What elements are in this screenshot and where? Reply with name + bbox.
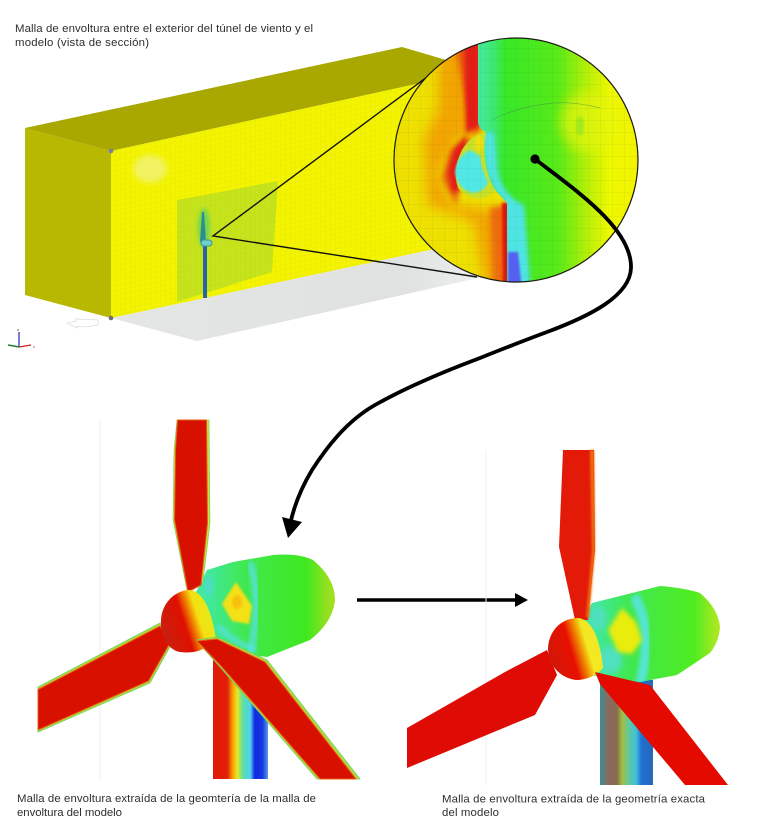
title: wind tunnel mesh caption: Malla de envoltura entre el exterior del túnel de viento y el bbox=[15, 23, 313, 35]
flow outline on floor bbox=[67, 319, 98, 328]
tower bbox=[213, 660, 268, 779]
straight arrow between turbines bbox=[357, 593, 528, 607]
flow region right of the model bbox=[478, 38, 638, 282]
curved arrow from circle to enlarged turbine bbox=[282, 154, 631, 538]
hub on section bbox=[201, 240, 212, 246]
hub bbox=[548, 618, 603, 680]
axis triad: x bbox=[33, 344, 35, 349]
axis triad: z bbox=[17, 327, 19, 332]
cyan band along tower bbox=[484, 132, 531, 290]
turbine from exact geometry bbox=[407, 450, 728, 785]
light patch on section bbox=[133, 155, 167, 183]
top outer face bbox=[25, 47, 480, 151]
zoom callout lines bbox=[213, 77, 477, 277]
blue wake patch bbox=[508, 252, 522, 290]
faint guide line left bbox=[99, 420, 101, 780]
faint guide line right bbox=[485, 450, 487, 785]
left blade bbox=[407, 650, 557, 768]
spinner yellow tip bbox=[475, 135, 483, 151]
refined mesh zone bbox=[177, 181, 278, 302]
left outer face bbox=[25, 128, 111, 318]
circle outline bbox=[394, 38, 638, 282]
turbine from wrap mesh bbox=[38, 420, 360, 779]
circle colour field bbox=[394, 38, 638, 282]
caption: wrap mesh turbine: envoltura del modelo bbox=[17, 807, 122, 819]
nacelle vent mark bbox=[576, 116, 584, 136]
nacelle yellow highlight bbox=[560, 92, 620, 152]
left blade bbox=[38, 623, 172, 732]
coarse mesh grid bbox=[390, 34, 642, 288]
corner marker top bbox=[109, 149, 113, 153]
corner marker bottom bbox=[109, 316, 113, 320]
top blade bbox=[173, 420, 210, 592]
floor plane bbox=[111, 235, 500, 341]
nacelle detail bbox=[590, 596, 646, 684]
axis triad bbox=[8, 327, 35, 349]
nacelle bbox=[578, 586, 720, 682]
wake glow on section bbox=[198, 208, 210, 248]
top blade warm edge bbox=[586, 450, 595, 618]
lower right blade bbox=[196, 637, 360, 779]
title: wind tunnel mesh caption: modelo (vista de sección) bbox=[15, 37, 149, 49]
tower bbox=[600, 680, 653, 785]
lower right blade bbox=[595, 672, 728, 785]
nacelle bbox=[192, 555, 335, 657]
magnified circle bbox=[390, 30, 645, 290]
nacelle upper edge bbox=[492, 103, 600, 120]
caption: exact geometry turbine: del modelo bbox=[442, 807, 499, 819]
yellow section plane bbox=[111, 70, 500, 318]
title: wind tunnel mesh caption bbox=[15, 23, 313, 49]
wind tunnel section view bbox=[25, 47, 500, 341]
spinner bbox=[456, 132, 495, 198]
top blade bbox=[559, 450, 595, 620]
spinner cyan centre bbox=[455, 150, 488, 193]
caption: wrap mesh turbine bbox=[17, 793, 316, 819]
caption: exact geometry turbine: Malla de envoltura extraída de la geometría exacta bbox=[442, 794, 706, 806]
caption: wrap mesh turbine: Malla de envoltura extraída de la geomtería de la malla de bbox=[17, 793, 316, 805]
blade on section bbox=[200, 212, 206, 242]
nacelle detail bbox=[205, 562, 256, 654]
hub bbox=[161, 590, 216, 652]
tower on section bbox=[203, 245, 207, 298]
caption: exact geometry turbine bbox=[442, 794, 706, 819]
